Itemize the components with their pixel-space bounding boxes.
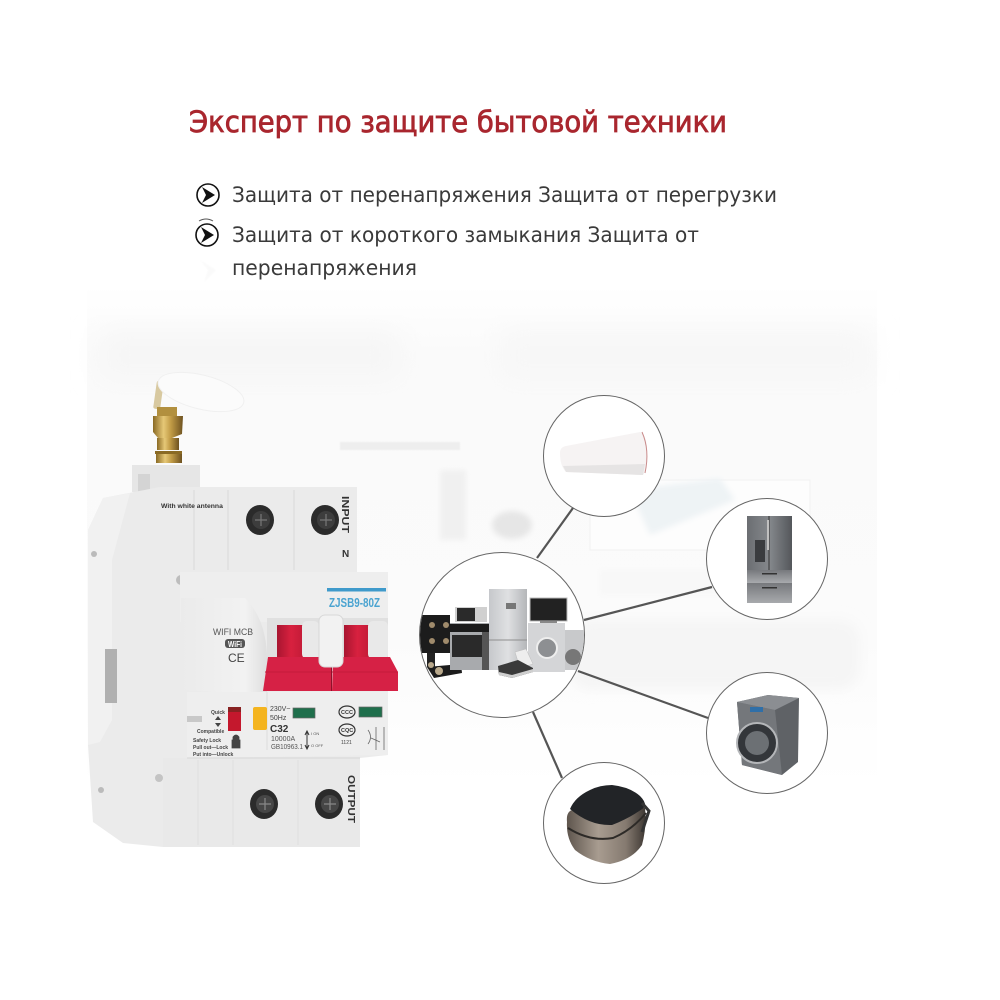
circuit breaker: [88, 365, 398, 847]
circle: air conditioner: [544, 396, 664, 516]
front panel markings: O OFF: [311, 743, 324, 748]
circle: refrigerator: [706, 498, 828, 620]
input output labels: OUTPUT: [345, 775, 356, 823]
front panel markings: 230V~: [270, 706, 290, 713]
wifi mcb label: WIFI MCB: [213, 627, 253, 638]
front panel markings: CQC: [341, 728, 353, 734]
washer and dryer: [528, 623, 586, 672]
front panel markings: I ON: [311, 731, 319, 736]
circle: all appliances: [419, 552, 586, 718]
wifi mcb label: WiFi: [228, 640, 242, 649]
icon: bullet arrow 2: [196, 219, 218, 246]
front panel markings: GB10963.1: [271, 744, 303, 751]
input output labels: N: [342, 549, 349, 560]
breaker body: [88, 465, 388, 847]
model label: ZJSB9-80Z: [329, 596, 380, 610]
red switches: [263, 615, 398, 691]
fridge: [489, 589, 527, 670]
speakers: [419, 615, 462, 678]
circle: rice cooker: [544, 762, 664, 884]
bullet text 2: Защита от короткого замыкания Защита от: [232, 223, 699, 247]
front panel markings: C32: [270, 724, 289, 735]
wifi mcb label: [213, 627, 253, 665]
icon: bullet arrow 1: [197, 184, 219, 206]
icon: faint ghost arrow: [200, 260, 216, 282]
input output labels: [161, 496, 356, 823]
front panel markings: Put into—Unlock: [193, 752, 233, 758]
title: Эксперт по защите бытовой техники: [189, 105, 727, 139]
front panel markings: [187, 706, 384, 758]
front panel markings: Compatible: [197, 729, 224, 735]
wifi mcb label: CE: [228, 651, 245, 665]
circle: washing machine: [706, 672, 828, 794]
bullet text 1: Защита от перенапряжения Защита от перегрузки: [232, 183, 777, 207]
input output labels: With white antenna: [161, 503, 223, 510]
front panel markings: 10000A: [271, 736, 295, 743]
antenna: [153, 365, 248, 463]
oven and microwave: [450, 607, 490, 670]
printer: [498, 649, 533, 678]
front panel markings: Safety Lock: [193, 738, 221, 744]
input output labels: INPUT: [339, 496, 350, 533]
front panel markings: 50Hz: [270, 715, 287, 722]
front panel markings: CCC: [341, 710, 353, 716]
connector lines: [533, 508, 712, 778]
front panel markings: 1121: [341, 740, 352, 746]
terminal screws: [246, 505, 343, 819]
model label: [327, 588, 386, 610]
faded room background: [87, 285, 877, 875]
bullet text 3: перенапряжения: [232, 256, 417, 280]
tv: [530, 598, 567, 624]
front panel markings: Pull out—Lock: [193, 745, 228, 751]
front panel markings: Quick: [211, 710, 225, 716]
bullet list: [196, 183, 777, 282]
